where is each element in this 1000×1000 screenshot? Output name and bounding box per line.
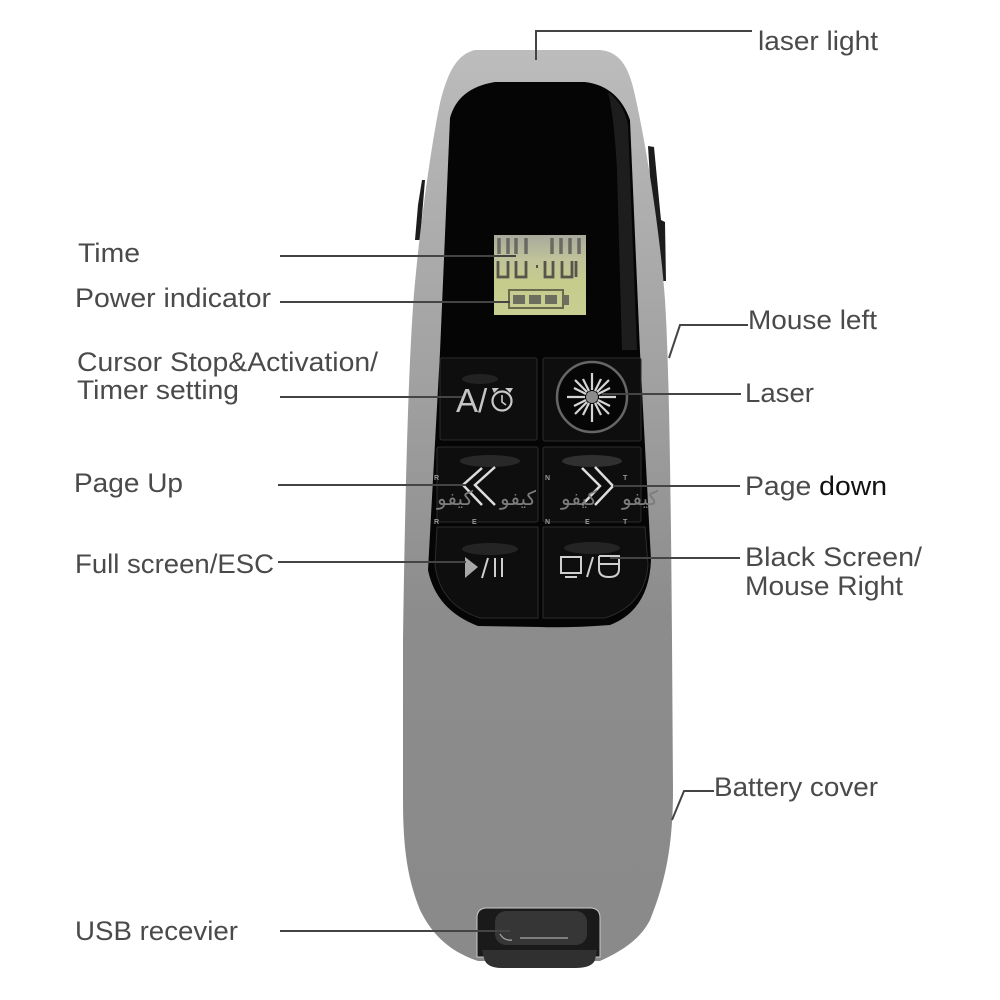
- watermark: E: [585, 519, 590, 526]
- label: page down: Page down: [745, 471, 887, 501]
- USB receiver: [477, 908, 600, 968]
- button: timer: A/: [456, 382, 488, 419]
- watermark: E: [472, 519, 477, 526]
- watermark: كيفو: [436, 486, 473, 510]
- presenter device: [403, 50, 673, 968]
- button: laser: [543, 358, 641, 441]
- label: USB receiver: USB recevier: [75, 916, 238, 946]
- device body: [403, 50, 673, 961]
- label: laser: Laser: [745, 378, 814, 408]
- button: page up: [437, 447, 538, 522]
- label: page up: Page Up: [74, 468, 183, 498]
- label: power indicator: Power indicator: [75, 283, 271, 313]
- face glossy edge: [608, 92, 637, 350]
- watermark: كيفو: [499, 486, 536, 510]
- label: mouse left: Mouse left: [748, 305, 878, 335]
- label: laser light: laser light: [758, 26, 879, 56]
- watermark: R: [434, 519, 439, 526]
- label: full screen: Full screen/ESC: [75, 549, 274, 579]
- button: play pause: [435, 527, 538, 618]
- watermark: N: [545, 519, 550, 526]
- button: black screen: [543, 527, 648, 618]
- watermark: R: [434, 475, 439, 482]
- side buttons: [415, 146, 666, 281]
- LCD battery: [509, 290, 569, 308]
- label: battery cover: Battery cover: [714, 772, 878, 802]
- button: timer: [440, 358, 537, 440]
- LCD display: [494, 235, 586, 315]
- label: time: Time: [78, 238, 140, 268]
- LCD ghost digits: [499, 238, 579, 254]
- label: timer setting: Timer setting: [77, 375, 239, 405]
- watermark: [434, 475, 658, 526]
- watermark: T: [623, 519, 628, 526]
- leader lines: [278, 31, 752, 931]
- black face panel: [428, 82, 651, 627]
- watermark: T: [623, 475, 628, 482]
- button: page down: [543, 447, 641, 522]
- label: black screen: Black Screen/: [745, 542, 923, 572]
- label: mouse right: Mouse Right: [745, 571, 904, 601]
- watermark: كيفو: [621, 486, 658, 510]
- LCD time digits: [498, 261, 576, 277]
- watermark: كيفو: [560, 486, 597, 510]
- label: cursor stop: Cursor Stop&Activation/: [77, 347, 379, 377]
- watermark: N: [545, 475, 550, 482]
